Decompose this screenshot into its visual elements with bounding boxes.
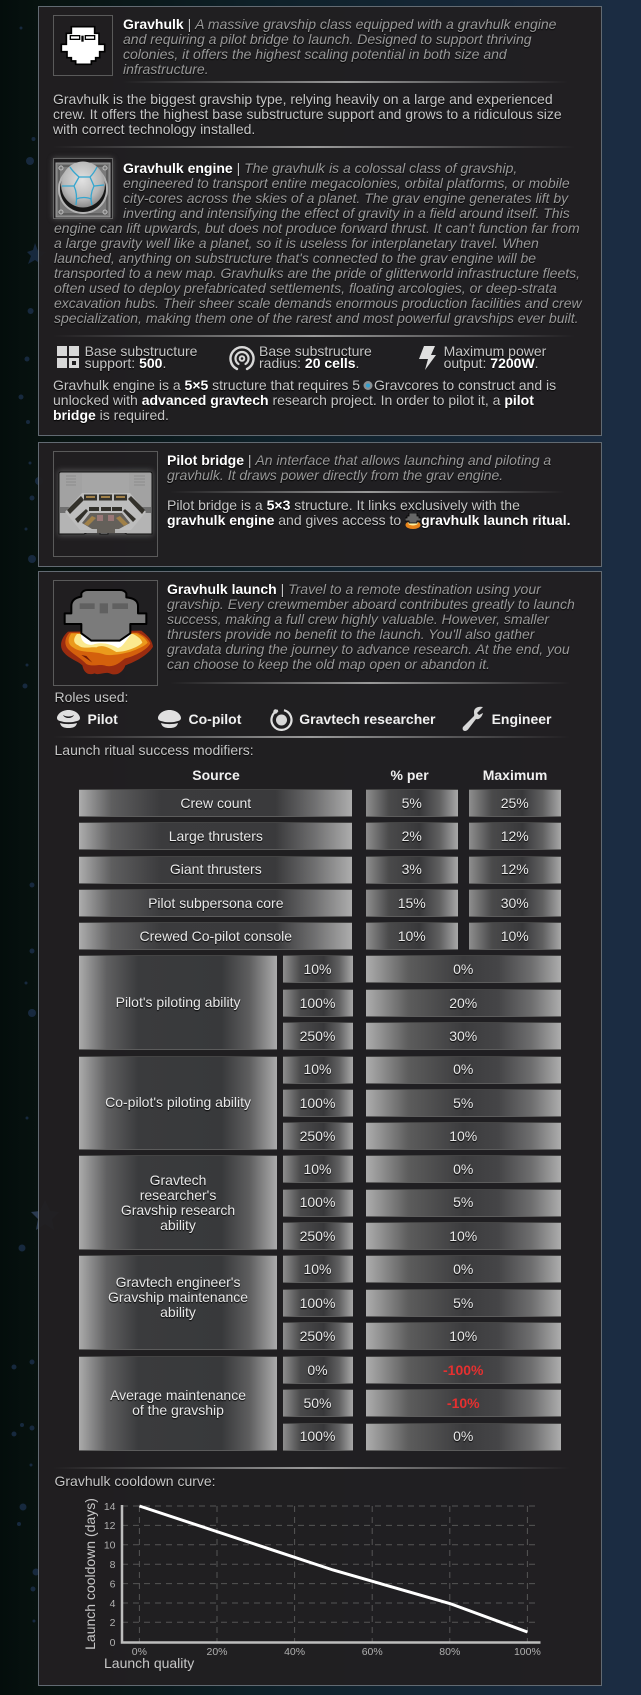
heading: gravhulk launch description: Gravhulk launch | Travel to a remote destination using your <box>167 581 541 597</box>
text: gravhulk engine description: transported to a new map. Gravhulks are the pride of glitterworld infrastructure fleets, <box>54 265 580 281</box>
text: gravhulk engine description: launched, anything on substructure that's connected to the grav engine will be <box>54 250 536 266</box>
text: gravhulk engine description: city-cores across the skies of a planet. The grav engine generates lift by <box>123 190 568 206</box>
table: launch ritual success modifiers: 250% <box>300 1028 335 1044</box>
stat: substructure radius <box>229 343 372 371</box>
table: launch ritual success modifiers: Large thrusters <box>169 828 263 844</box>
chart: cooldown curve: 0% <box>132 1646 147 1658</box>
table: launch ritual success modifiers: 250% <box>300 1328 335 1344</box>
heading: pilot bridge description: gravhulk. It draws power directly from the grav engine. <box>167 467 503 483</box>
chart: cooldown curve: 20% <box>206 1646 228 1658</box>
table: launch ritual success modifiers: 25% <box>501 795 529 811</box>
table: launch ritual success modifiers: Gravtech <box>150 1172 206 1188</box>
table: launch ritual success modifiers: Pilot subpersona core <box>148 894 284 910</box>
chart: cooldown curve: 40% <box>284 1646 305 1658</box>
text: engine requirements <box>53 377 556 424</box>
text: gravhulk engine description: inverting and intensifying the effect of gravity in a field around itself. This <box>123 205 570 221</box>
table: launch ritual success modifiers: 12% <box>501 861 529 877</box>
table: launch ritual success modifiers: 30% <box>449 1028 477 1044</box>
icon: pilot bridge console <box>53 451 158 557</box>
stat: maximum power <box>419 343 546 372</box>
table: launch ritual success modifiers: 5% <box>453 1294 473 1310</box>
table header: % per <box>391 767 429 783</box>
panel: gravhulk: excavation hubs. Their sheer scale demands enormous production facilities and crew <box>54 295 582 311</box>
stat: maximum power: Maximum power <box>444 343 546 359</box>
table: launch ritual success modifiers: 10% <box>398 928 426 944</box>
text: pilot bridge details: Pilot bridge is a 5×3 structure. It links exclusively with the <box>167 497 520 513</box>
table: launch ritual success modifiers: 250% <box>300 1128 335 1144</box>
role: gravtech researcher: Gravtech researcher <box>299 711 436 727</box>
table: launch ritual success modifiers: 0% <box>453 961 473 977</box>
table: launch ritual success modifiers <box>79 767 561 1451</box>
table: launch ritual success modifiers: 2% <box>402 828 422 844</box>
stat: substructure support: support: 500. <box>85 355 166 371</box>
chart: cooldown curve: 4 <box>110 1598 116 1610</box>
chart: cooldown curve: 14 <box>104 1501 116 1513</box>
role: engineer: Engineer <box>492 711 552 727</box>
chart: cooldown curve: 80% <box>439 1646 460 1658</box>
chart: cooldown curve: 12 <box>104 1520 116 1532</box>
table: launch ritual success modifiers: Average maintenance <box>110 1387 246 1403</box>
chart: cooldown curve: 2 <box>110 1617 116 1629</box>
heading: gravhulk launch description <box>167 581 575 673</box>
stat: maximum power: output: 7200W. <box>444 355 539 371</box>
text: pilot bridge details <box>167 497 570 530</box>
icon: gravhulk ship <box>53 15 113 76</box>
table: launch ritual success modifiers: Giant thrusters <box>170 861 262 877</box>
text: engine requirements: bridge is required. <box>53 407 169 423</box>
text: gravhulk engine description: a large gravity well like a planet, so it is useless for interplanetary travel. When <box>54 235 539 251</box>
heading: gravhulk description: and requiring a pilot bridge to launch. Designed to support thriving <box>123 31 532 47</box>
table: launch ritual success modifiers: 12% <box>501 828 529 844</box>
stat: substructure radius: radius: 20 cells. <box>259 355 359 371</box>
heading: pilot bridge description: Pilot bridge | An interface that allows launching and piloting a <box>167 452 551 468</box>
table: launch ritual success modifiers: Gravtech engineer's <box>116 1274 240 1290</box>
text: gravhulk engine description: engine can lift upwards, but does not produce forward thrust. It can't function far from <box>54 220 580 236</box>
table: launch ritual success modifiers: 100% <box>300 1194 335 1210</box>
table header: Maximum <box>483 767 547 783</box>
role: pilot <box>57 710 118 728</box>
heading: pilot bridge description <box>167 452 551 484</box>
table: launch ritual success modifiers: 10% <box>501 928 529 944</box>
panel: gravhulk launch <box>38 571 602 1686</box>
chart: cooldown curve <box>82 1498 541 1671</box>
text: gravhulk overview: with correct technology installed. <box>53 121 255 137</box>
heading: gravhulk description <box>123 16 556 77</box>
roles row <box>57 706 552 731</box>
chart: cooldown curve: Launch quality <box>104 1655 194 1671</box>
table: launch ritual success modifiers: 30% <box>501 894 529 910</box>
heading: gravhulk launch description: can choose to keep the old map open or abandon it. <box>167 656 490 672</box>
table: launch ritual success modifiers: ability <box>160 1216 196 1232</box>
table: launch ritual success modifiers: 250% <box>300 1228 335 1244</box>
table: launch ritual success modifiers: Gravship maintenance <box>108 1289 248 1305</box>
chart: cooldown curve: 0 <box>110 1637 116 1649</box>
text: gravhulk engine description: Gravhulk engine | The gravhulk is a colossal class of gravship, <box>123 160 517 176</box>
stat: substructure support <box>57 343 197 372</box>
table: launch ritual success modifiers: 100% <box>300 1294 335 1310</box>
table: launch ritual success modifiers: 10% <box>303 961 332 977</box>
icon: signal rings <box>229 346 255 370</box>
table: launch ritual success modifiers: ability <box>160 1304 196 1320</box>
table: launch ritual success modifiers: 10% <box>449 1328 477 1344</box>
table: launch ritual success modifiers: Gravship research <box>121 1202 235 1218</box>
role: gravtech researcher <box>270 709 436 731</box>
icon: gravhulk launch <box>53 580 158 686</box>
panel: pilot bridge <box>38 442 602 567</box>
chart: cooldown curve: Launch cooldown (days) <box>82 1498 98 1650</box>
table: launch ritual success modifiers: 0% <box>453 1428 473 1444</box>
heading: gravhulk launch description: gravdata during the journey to advance research. At the end, you <box>167 641 570 657</box>
text: modifiers title: Launch ritual success modifiers: <box>54 742 254 758</box>
table: launch ritual success modifiers: 10% <box>303 1160 332 1176</box>
table: launch ritual success modifiers: 0% <box>307 1362 328 1378</box>
table: launch ritual success modifiers: 5% <box>402 795 422 811</box>
text: engine requirements: unlocked with advanced gravtech research project. In order to pilot it, a pilot <box>53 392 534 408</box>
role: co-pilot <box>158 710 242 728</box>
role: pilot: Pilot <box>88 711 118 727</box>
role: engineer <box>462 706 552 731</box>
table: launch ritual success modifiers: 0% <box>453 1160 473 1176</box>
chart: cooldown curve: 10 <box>104 1540 116 1552</box>
panel: gravhulk <box>38 6 602 436</box>
chart: cooldown curve: 60% <box>362 1646 383 1658</box>
role: co-pilot: Co-pilot <box>188 711 241 727</box>
heading: gravhulk launch description: thrusters provide no benefit to the launch. You'll also gather <box>167 626 534 642</box>
chart: cooldown curve: 100% <box>514 1646 541 1658</box>
table: launch ritual success modifiers: -100% <box>443 1362 483 1378</box>
table: launch ritual success modifiers: 0% <box>453 1061 473 1077</box>
table: launch ritual success modifiers: 5% <box>453 1194 473 1210</box>
table: launch ritual success modifiers: -10% <box>447 1394 480 1410</box>
table: launch ritual success modifiers: researcher's <box>140 1186 216 1202</box>
table: launch ritual success modifiers: 10% <box>449 1128 477 1144</box>
curve line <box>139 1506 527 1632</box>
stat: substructure support: Base substructure <box>85 343 197 359</box>
icon: substructure grid <box>57 346 79 368</box>
table: launch ritual success modifiers: 20% <box>449 994 477 1010</box>
text: engine requirements: Gravhulk engine is a 5×5 structure that requires 5 Gravcores to construct and is <box>53 377 556 393</box>
text: gravhulk overview <box>53 91 562 138</box>
table header: Source <box>192 767 240 783</box>
table: launch ritual success modifiers: 15% <box>398 894 426 910</box>
table: launch ritual success modifiers: 3% <box>402 861 422 877</box>
table: launch ritual success modifiers: 10% <box>303 1260 332 1276</box>
table: launch ritual success modifiers: Co-pilot's piloting ability <box>105 1094 251 1110</box>
text: cooldown curve title: Gravhulk cooldown curve: <box>54 1473 216 1489</box>
heading: gravhulk description: colonies, it offers the highest scaling potential in both size and <box>123 46 507 62</box>
table: launch ritual success modifiers: Crew count <box>180 795 251 811</box>
table header <box>192 767 547 783</box>
text: roles used: Roles used: <box>54 689 128 705</box>
table: launch ritual success modifiers: 100% <box>300 1428 335 1444</box>
table: launch ritual success modifiers: Pilot's piloting ability <box>116 994 240 1010</box>
text: gravhulk overview: crew. It offers the highest base substructure support and grows to a ridiculous size <box>53 106 562 122</box>
table: launch ritual success modifiers: of the gravship <box>132 1402 224 1418</box>
chart: cooldown curve: 8 <box>110 1559 116 1571</box>
heading: gravhulk launch description: gravship. Every crewmember aboard contributes greatly to launch <box>167 596 575 612</box>
panel: gravhulk: often used to deploy prefabricated settlements, floating arcologies, or deep-strata <box>54 280 557 296</box>
text: gravhulk engine description <box>54 160 582 327</box>
table: launch ritual success modifiers: 100% <box>300 1094 335 1110</box>
stat: substructure radius: Base substructure <box>259 343 372 359</box>
text: pilot bridge details: gravhulk engine and gives access to gravhulk launch ritual. <box>167 512 570 528</box>
icon: lightning bolt <box>419 346 436 370</box>
table: launch ritual success modifiers: 10% <box>449 1228 477 1244</box>
panel: gravhulk: specialization, making them one of the rarest and most powerful gravships ever built. <box>54 310 578 326</box>
table: launch ritual success modifiers: 0% <box>453 1260 473 1276</box>
table: launch ritual success modifiers: 5% <box>453 1094 473 1110</box>
heading: gravhulk description: infrastructure. <box>123 61 209 77</box>
heading: gravhulk launch description: success, making a full crew highly valuable. However, smaller <box>167 611 549 627</box>
table: launch ritual success modifiers: 100% <box>300 994 335 1010</box>
table: launch ritual success modifiers: 10% <box>303 1061 332 1077</box>
table: launch ritual success modifiers: 50% <box>303 1394 332 1410</box>
icon: gravhulk engine <box>53 158 113 219</box>
chart: cooldown curve: 6 <box>110 1578 116 1590</box>
heading: gravhulk description: Gravhulk | A massive gravship class equipped with a gravhulk engine <box>123 16 556 32</box>
text: gravhulk engine description: engineered to transport entire megacolonies, orbital platforms, or mobile <box>123 175 570 191</box>
table: launch ritual success modifiers: Crewed Co-pilot console <box>140 928 292 944</box>
text: gravhulk overview: Gravhulk is the biggest gravship type, relying heavily on a large and experienced <box>53 91 553 107</box>
